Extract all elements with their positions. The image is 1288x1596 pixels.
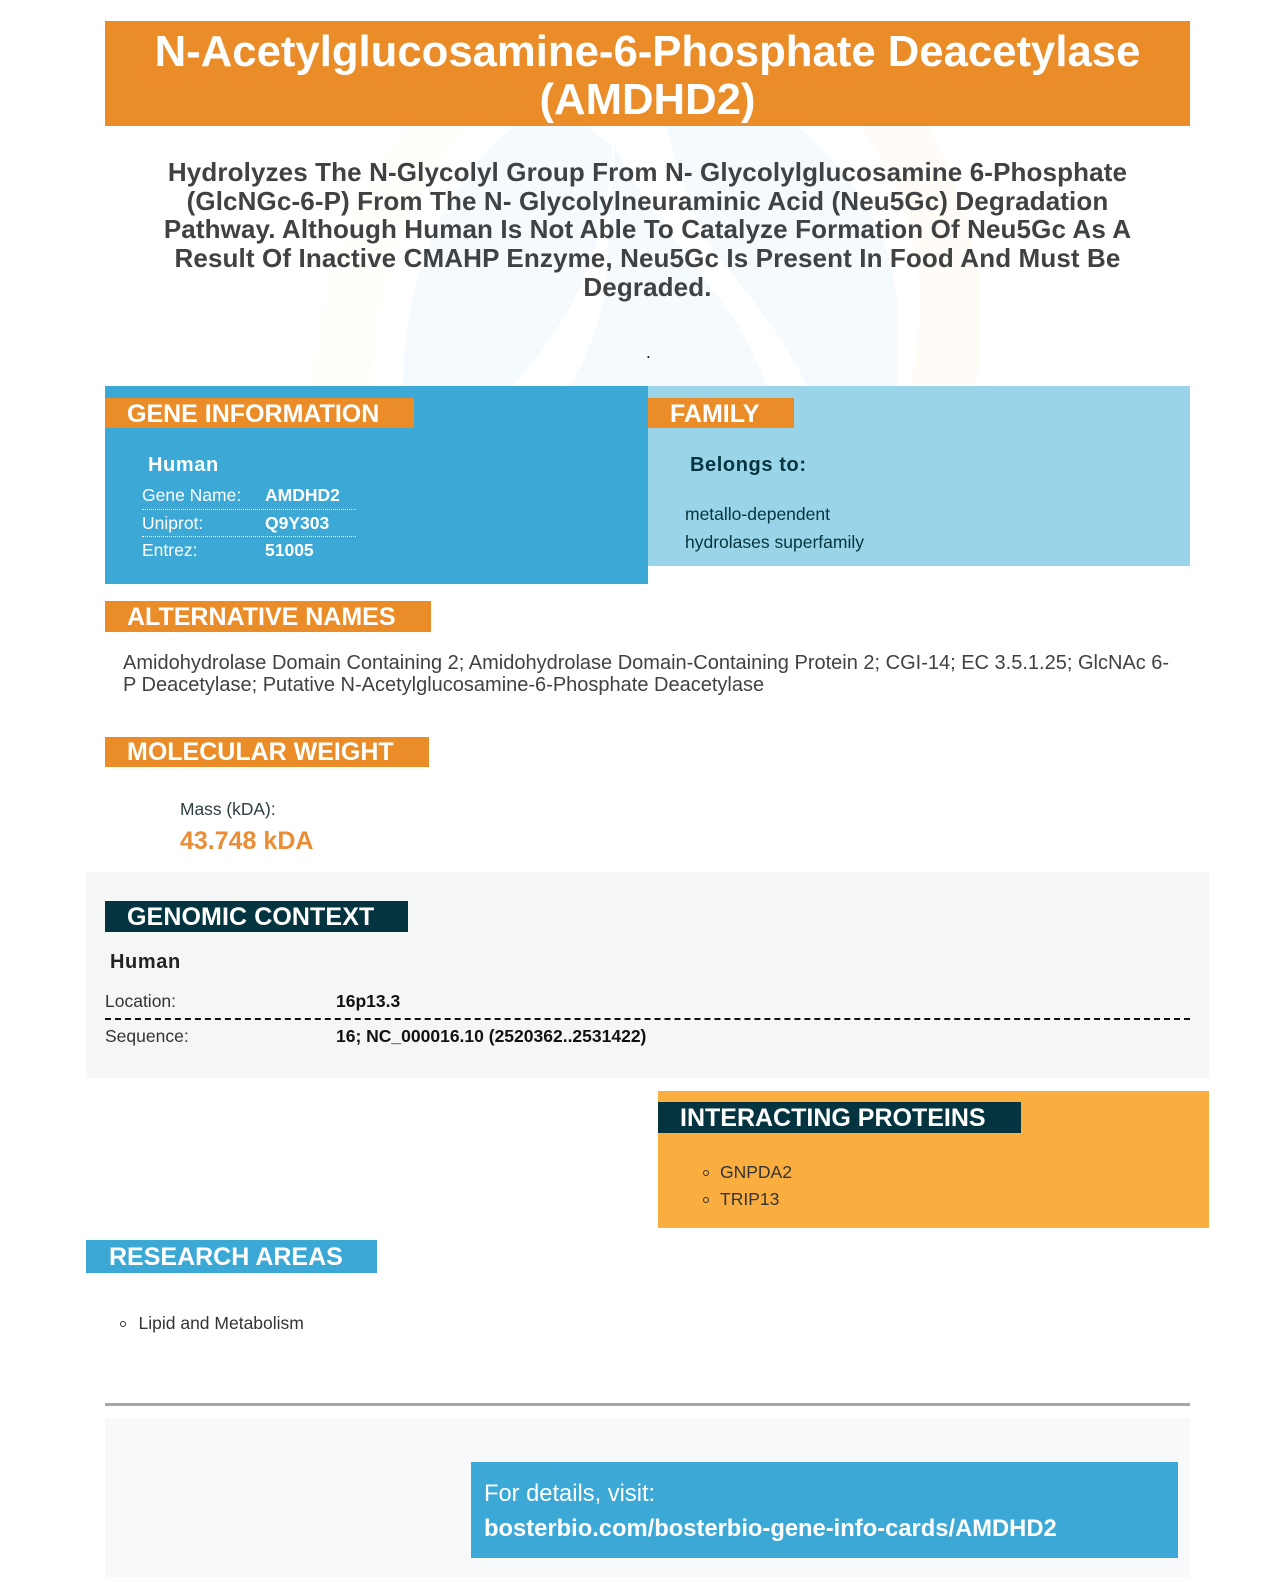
location row: 16p13.3 (336, 991, 400, 1011)
panel: genomic context (86, 872, 1209, 1078)
panel: family (648, 386, 1190, 566)
description text (164, 157, 1131, 302)
background watermark logo (403, 126, 897, 386)
gene name row: AMDHD2 (265, 485, 340, 505)
location row (105, 989, 1190, 1020)
alternative names text: P Deacetylase; Putative N-Acetylglucosamine-6-Phosphate Deacetylase (123, 674, 764, 696)
url: bosterbio.com/bosterbio-gene-info-cards/AMDHD2 (484, 1515, 1057, 1542)
protein: GNPDA2: GNPDA2 (720, 1162, 792, 1182)
description text: Pathway. Although Human Is Not Able To Catalyze Formation Of Neu5Gc As A (164, 214, 1131, 244)
sequence row: 16; NC_000016.10 (2520362..2531422) (336, 1026, 646, 1046)
alternative names text (123, 652, 1169, 696)
dot: . (646, 343, 651, 362)
footer rule (105, 1403, 1190, 1406)
heading: interacting proteins: INTERACTING PROTEINS (680, 1104, 986, 1132)
heading: research areas (86, 1240, 377, 1273)
heading: genomic context: GENOMIC CONTEXT (127, 903, 374, 931)
visit label: For details, visit: (484, 1481, 655, 1507)
bullet: lipid and metabolism (120, 1321, 126, 1327)
research area text: Lipid and Metabolism (138, 1313, 304, 1333)
family text (685, 504, 864, 552)
description text: (GlcNGc-6-P) From The N- Glycolylneuraminic Acid (Neu5Gc) Degradation (187, 186, 1108, 216)
heading: molecular weight: MOLECULAR WEIGHT (127, 738, 394, 766)
panel: gene information (105, 386, 648, 584)
species label: Human (110, 951, 181, 973)
family text: metallo-dependent (685, 504, 830, 524)
mass value: 43.748 kDA (180, 827, 313, 855)
sequence row: Sequence: (105, 1026, 189, 1046)
belongs to label: Belongs to: (690, 454, 807, 476)
panel: interacting proteins (658, 1091, 1209, 1228)
title banner (105, 21, 1190, 126)
heading: family: FAMILY (670, 400, 759, 428)
protein: TRIP13: TRIP13 (720, 1189, 779, 1209)
gene name row (142, 483, 356, 510)
bullet: TRIP13 (703, 1197, 709, 1203)
gene name row: Gene Name: (142, 485, 241, 505)
heading: research areas: RESEARCH AREAS (109, 1243, 343, 1271)
description text: Result Of Inactive CMAHP Enzyme, Neu5Gc Is Present In Food And Must Be (174, 243, 1121, 273)
call to action box (471, 1462, 1178, 1558)
heading: family (648, 398, 794, 428)
title banner: (AMDHD2) (540, 75, 755, 124)
heading: alternative names: ALTERNATIVE NAMES (127, 603, 396, 631)
title banner: N-Acetylglucosamine-6-Phosphate Deacetylase (155, 27, 1140, 76)
uniprot row: Q9Y303 (265, 513, 329, 533)
family text: hydrolases superfamily (685, 532, 864, 552)
panel: footer (105, 1418, 1190, 1577)
entrez row: Entrez: (142, 540, 197, 560)
mass label: Mass (kDA): (180, 799, 276, 819)
entrez row: 51005 (265, 540, 314, 560)
uniprot row (142, 510, 356, 537)
species label: Human (148, 454, 219, 476)
bullet: GNPDA2 (703, 1170, 709, 1176)
location row: Location: (105, 991, 176, 1011)
description text: Hydrolyzes The N-Glycolyl Group From N- Glycolylglucosamine 6-Phosphate (168, 157, 1127, 187)
uniprot row: Uniprot: (142, 513, 203, 533)
description text: Degraded. (583, 272, 712, 302)
entrez row (142, 540, 314, 560)
heading: gene information: GENE INFORMATION (127, 400, 379, 428)
alternative names text: Amidohydrolase Domain Containing 2; Amidohydrolase Domain-Containing Protein 2; CGI-14; EC 3.5.1.25; GlcNAc 6- (123, 652, 1169, 674)
sequence row (105, 1026, 646, 1046)
